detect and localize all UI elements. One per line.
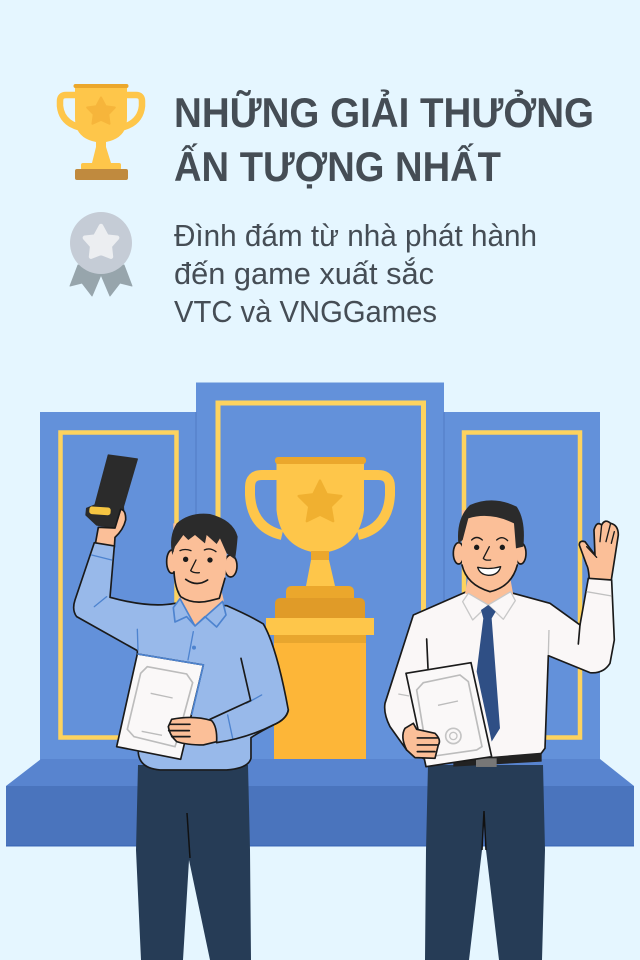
man left: trousers <box>136 765 251 960</box>
subtitle: VTC và VNGGames <box>174 294 437 329</box>
subtitle: đến game xuất sắc <box>174 256 434 291</box>
shirt details <box>92 555 262 738</box>
shirt details <box>398 592 612 696</box>
collar <box>173 599 226 627</box>
man right: trousers <box>425 765 545 960</box>
neck <box>177 587 224 626</box>
hand holding certificate <box>168 717 217 745</box>
certificate <box>406 663 492 767</box>
raised hand <box>95 509 126 547</box>
head <box>453 500 526 592</box>
phone <box>86 455 137 528</box>
title: NHỮNG GIẢI THƯỞNG <box>174 88 594 136</box>
large trophy on pedestal <box>250 457 390 759</box>
waving hand <box>579 521 618 580</box>
collar <box>463 592 515 620</box>
icon: silver medal <box>70 212 132 296</box>
title: ẤN TƯỢNG NHẤT <box>174 143 501 190</box>
man left: upper body holding phone and certificate <box>74 455 288 770</box>
stage <box>6 759 634 846</box>
man right: upper body waving and holding certificate <box>385 500 618 767</box>
subtitle <box>174 218 537 329</box>
blue shirt <box>74 543 288 770</box>
icon: gold trophy <box>60 84 142 180</box>
neck <box>465 577 513 605</box>
sleeve end outline <box>217 710 288 743</box>
head <box>167 514 238 602</box>
tie <box>477 605 500 742</box>
white shirt <box>385 578 614 760</box>
backdrop panels <box>40 382 600 760</box>
belt <box>453 753 542 767</box>
subtitle: Đình đám từ nhà phát hành <box>174 218 537 253</box>
hand holding certificate <box>403 723 439 758</box>
title <box>174 88 594 190</box>
certificate <box>117 654 203 759</box>
